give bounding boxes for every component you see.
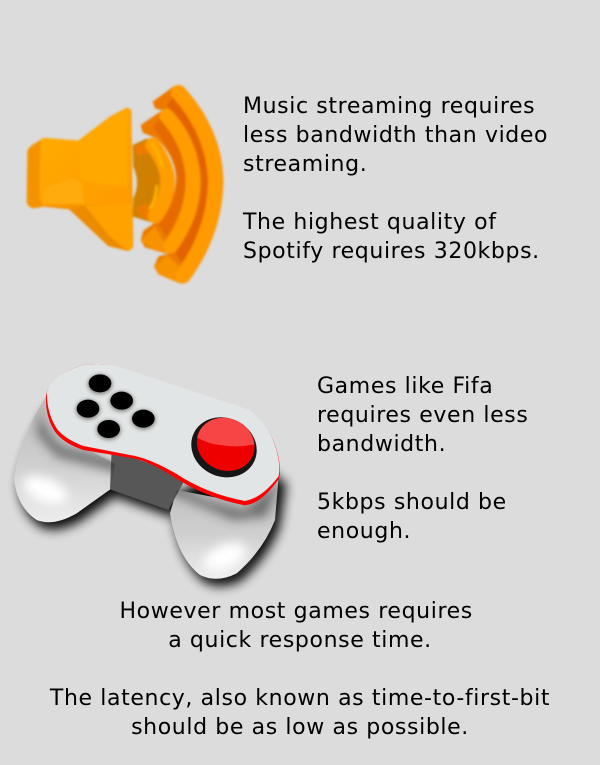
text: response time and latency: The latency, also known as time-to-first-bit <box>50 686 550 711</box>
text: music streaming: Spotify requires 320kbps. <box>243 239 540 264</box>
left grip <box>14 397 115 522</box>
controller shadow <box>19 404 286 586</box>
text: response time and latency: a quick response time. <box>168 628 432 653</box>
text: music streaming: Music streaming requires <box>243 94 535 119</box>
text: music streaming <box>242 94 548 264</box>
right grip <box>170 480 278 579</box>
text: games bandwidth: enough. <box>317 519 411 544</box>
text: music streaming: streaming. <box>243 152 367 177</box>
top plate with red edge <box>46 364 280 505</box>
center body <box>110 450 187 510</box>
text: games bandwidth: 5kbps should be <box>317 490 507 515</box>
action buttons <box>76 374 155 440</box>
text: music streaming: The highest quality of <box>243 210 497 235</box>
arc sides <box>141 111 201 253</box>
text: games bandwidth: bandwidth. <box>317 432 446 457</box>
text: response time and latency: However most games requires <box>120 599 473 624</box>
text: response time and latency: should be as low as possible. <box>131 715 469 740</box>
arc fronts <box>153 145 168 216</box>
icon: orange speaker <box>27 87 223 283</box>
text: music streaming: less bandwidth than video <box>243 123 548 148</box>
text: games bandwidth: Games like Fifa <box>317 374 493 399</box>
text: games bandwidth <box>317 374 528 544</box>
icon: game controller <box>14 364 286 586</box>
speaker rear cup <box>133 139 163 222</box>
text: response time and latency <box>50 599 550 740</box>
text: games bandwidth: requires even less <box>317 403 528 428</box>
red joystick <box>191 417 257 478</box>
